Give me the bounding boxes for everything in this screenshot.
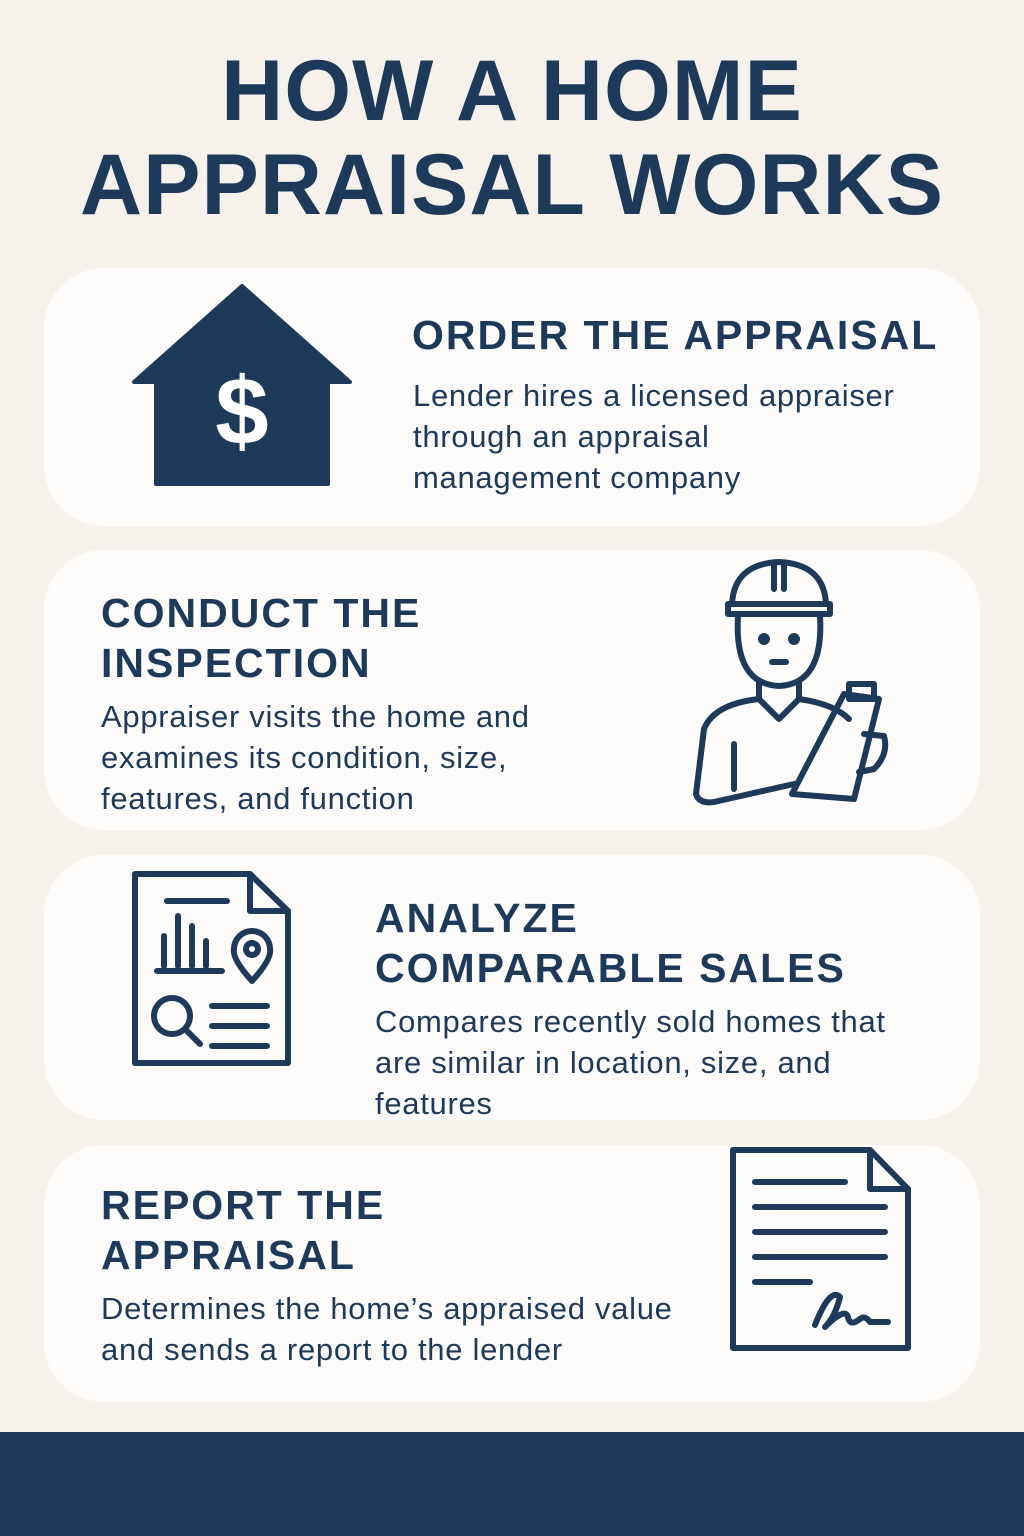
text: Determines the home’s appraised value [101,1291,673,1326]
icon: report with chart [132,871,291,1066]
panel: order the appraisal [44,268,980,526]
title: APPRAISAL WORKS [80,137,944,233]
text: Lender hires a licensed appraiser [413,378,894,413]
icon: house with dollar: $ [215,358,269,465]
text: and sends a report to the lender [101,1332,563,1367]
heading: APPRAISAL [101,1232,356,1278]
text [413,378,894,495]
text: features, and function [101,781,415,816]
icon: inspector with clipboard [693,559,888,806]
icon: house with dollar [132,284,352,486]
panel: report the appraisal [44,1145,980,1402]
title [80,43,944,233]
text: are similar in location, size, and [375,1045,831,1080]
footer bar [0,1432,1024,1536]
text [375,1004,886,1121]
heading: ORDER THE APPRAISAL [412,312,938,358]
title: HOW A HOME [221,43,803,139]
text: examines its condition, size, [101,740,507,775]
heading [375,895,846,991]
text: management company [413,460,741,495]
heading [101,1182,385,1278]
heading: COMPARABLE SALES [375,945,846,991]
text [101,1291,673,1367]
panel: conduct the inspection [44,550,980,830]
icon: signed document [730,1147,911,1351]
text: features [375,1086,493,1121]
heading: REPORT THE [101,1182,385,1228]
text [101,699,530,816]
text: Appraiser visits the home and [101,699,530,734]
heading: INSPECTION [101,640,372,686]
text: through an appraisal [413,419,710,454]
panel: analyze comparable sales [44,855,980,1120]
text: Compares recently sold homes that [375,1004,886,1039]
heading: CONDUCT THE [101,590,421,636]
heading [101,590,421,686]
heading: ANALYZE [375,895,579,941]
